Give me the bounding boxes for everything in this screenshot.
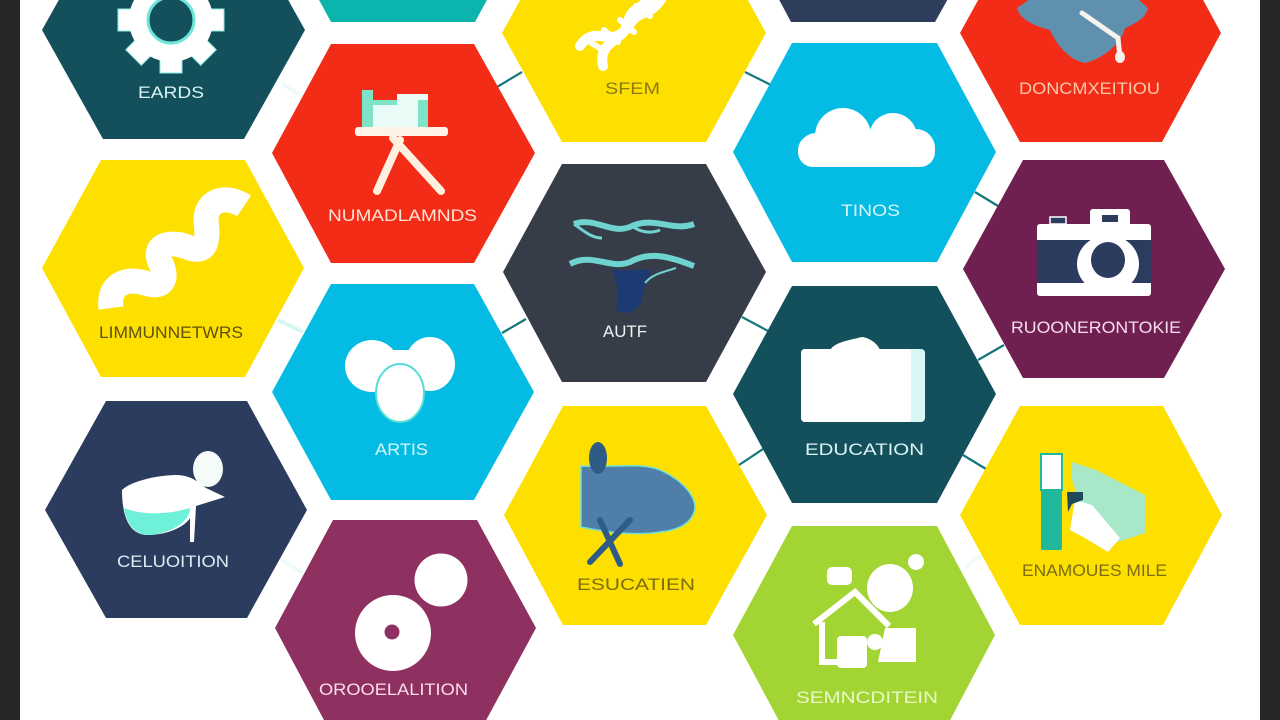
panel: gears hexagon — [42, 0, 305, 139]
label: whale: ESUCATIEN — [577, 575, 695, 594]
panel: hand hexagon — [960, 406, 1222, 625]
label: table: NUMADLAMNDS — [328, 206, 477, 225]
label: gears: EARDS — [138, 83, 204, 102]
icon: circles — [355, 554, 468, 671]
label: STEM: SFEM — [605, 79, 660, 98]
label: animal: CELUOITION — [117, 552, 229, 571]
icon: hand and bottle — [1041, 454, 1145, 552]
icon: graduation cap — [1017, 0, 1148, 63]
label: circles: OROOELALITION — [319, 680, 468, 699]
panel: camera hexagon — [963, 160, 1225, 378]
panel: wave hexagon — [42, 160, 304, 377]
panel: top teal hexagon — [272, 0, 534, 22]
panel: art hexagon — [272, 284, 534, 500]
icon: DNA — [580, 0, 664, 66]
panel: cloud hexagon — [733, 43, 996, 262]
icon: wave — [111, 200, 244, 308]
panel: animal hexagon — [45, 401, 307, 618]
panel: table hexagon — [272, 44, 535, 263]
icon: whale — [581, 442, 695, 564]
icon: home — [814, 554, 924, 668]
label: wave: LIMMUNNETWRS — [99, 323, 243, 342]
icon: waves — [570, 222, 694, 313]
panel: waves hexagon — [503, 164, 766, 382]
icon: cupcakes — [345, 337, 455, 422]
panel: top navy hexagon — [733, 0, 996, 22]
panel: STEM hexagon — [502, 0, 766, 142]
icon: gear — [118, 0, 224, 73]
panel: whale hexagon — [504, 406, 767, 625]
icon: camera — [1037, 209, 1151, 296]
panel: circles hexagon — [275, 520, 536, 720]
panel: education hexagon — [733, 286, 996, 503]
label: education: EDUCATION — [805, 440, 924, 459]
icon: animal — [122, 451, 225, 542]
label: cloud: TINOS — [841, 201, 900, 220]
label: camera: RUOONERONTOKIE — [1011, 318, 1181, 337]
label: waves: AUTF — [603, 322, 647, 341]
label: home: SEMNCDITEIN — [796, 688, 938, 707]
icon: table — [355, 90, 448, 191]
icon: cloud — [798, 108, 935, 167]
panel: home hexagon — [733, 526, 995, 720]
label: hand: ENAMOUES MILE — [1022, 561, 1167, 580]
label: art: ARTIS — [375, 440, 428, 459]
panel: graduation hexagon — [960, 0, 1221, 142]
icon: briefcase — [801, 337, 925, 422]
label: graduation: DONCMXEITIOU — [1019, 79, 1160, 98]
